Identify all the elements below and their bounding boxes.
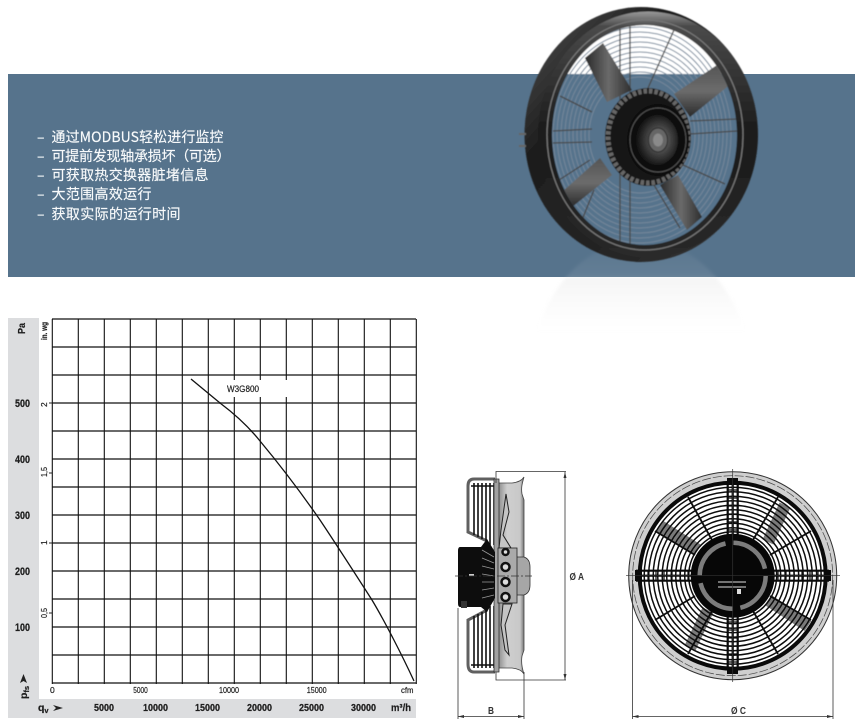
centre lines [626, 469, 840, 682]
airflow axis labels: m³/h [391, 702, 411, 714]
cfm axis labels: 15000 [307, 685, 327, 695]
guard outline [468, 479, 495, 672]
centre line [455, 575, 532, 577]
pressure axis labels [15, 323, 31, 699]
pressure axis labels: 500 [15, 398, 30, 410]
motor details [718, 582, 746, 587]
performance curve [191, 379, 414, 681]
airflow axis labels: q [38, 702, 44, 714]
bell housing [498, 477, 524, 674]
feature list: 可获取热交换器脏堵信息 [52, 165, 208, 185]
curve label [224, 380, 288, 397]
airflow axis labels: 5000 [94, 702, 114, 714]
pressure axis labels: p [18, 693, 30, 699]
cross bars [636, 481, 829, 670]
diagonal struts [655, 497, 811, 654]
performance chart [8, 318, 416, 718]
cfm axis labels: 0 [50, 685, 55, 695]
pressure axis labels: 200 [15, 566, 30, 578]
flange [494, 479, 499, 672]
hub bump [515, 557, 530, 595]
blue feature panel [8, 74, 855, 277]
dimension A [496, 472, 584, 680]
feature list: – [37, 127, 45, 147]
feature list [37, 127, 230, 224]
airflow axis labels: 10000 [143, 702, 168, 714]
feature list: 可提前发现轴承损坏（可选） [52, 146, 230, 166]
feature list: – [37, 165, 45, 185]
hub [498, 548, 517, 603]
pressure axis labels: 100 [15, 622, 30, 634]
cfm axis labels: 10000 [219, 685, 239, 695]
feature list: – [37, 146, 45, 166]
cfm axis labels [50, 685, 414, 695]
feature list: – [37, 184, 45, 204]
mounting pins [519, 134, 526, 146]
motor fins [482, 550, 494, 598]
in. wg axis labels: 0,5 [39, 608, 49, 618]
pressure arrow [20, 674, 27, 683]
side view drawing [455, 472, 584, 719]
fan product photo [519, 7, 758, 262]
airflow axis labels [38, 702, 411, 715]
motor [458, 539, 495, 612]
guard rim [640, 483, 826, 669]
blades [499, 494, 512, 655]
airflow axis labels: 20000 [247, 702, 272, 714]
airflow axis labels: v [44, 706, 49, 715]
motor hub [691, 534, 775, 618]
curve label: W3G800 [227, 384, 259, 394]
feature list: 大范围高效运行 [52, 184, 152, 204]
dimension B: B [488, 705, 494, 717]
cfm axis labels: cfm [401, 685, 414, 695]
fan arms [585, 43, 632, 102]
in. wg axis labels: in. wg [39, 322, 49, 340]
feature list: – [37, 204, 45, 224]
airflow axis labels: 15000 [195, 702, 220, 714]
motor hub [610, 102, 650, 174]
pressure axis labels: Pa [16, 323, 28, 334]
cfm axis labels: 5000 [133, 685, 148, 695]
housing [629, 472, 837, 680]
dimension C: Ø C [731, 705, 746, 717]
horizontal grid [52, 319, 416, 683]
chart axis bands [8, 318, 416, 718]
pressure axis labels: 300 [15, 510, 30, 522]
front view drawing [626, 469, 840, 719]
fan blade shadows [660, 505, 808, 648]
outer ring [524, 7, 758, 262]
wire guard rings [549, 27, 731, 243]
in. wg axis labels: 2 [39, 402, 49, 407]
dimension A: Ø A [570, 571, 584, 583]
pressure axis labels: fs [22, 686, 31, 693]
vertical grid [52, 319, 416, 684]
dimension B [458, 608, 524, 719]
in. wg axis labels [39, 322, 52, 618]
pressure axis labels: 400 [15, 454, 30, 466]
guard rings [644, 487, 821, 664]
guard wires [474, 483, 494, 668]
wire guard struts [553, 26, 737, 246]
dimension C [632, 580, 833, 719]
in. wg axis labels: 1 [39, 540, 49, 545]
feature list: 获取实际的运行时间 [52, 204, 180, 224]
airflow axis labels: 25000 [299, 702, 324, 714]
feature list: 通过MODBUS轻松进行监控 [52, 127, 224, 147]
hub bolts [502, 549, 510, 601]
connector [461, 601, 467, 608]
bar end caps [635, 478, 831, 674]
fan reflection [565, 258, 717, 284]
in. wg axis labels: 1,5 [39, 467, 49, 477]
airflow axis labels: 30000 [351, 702, 376, 714]
